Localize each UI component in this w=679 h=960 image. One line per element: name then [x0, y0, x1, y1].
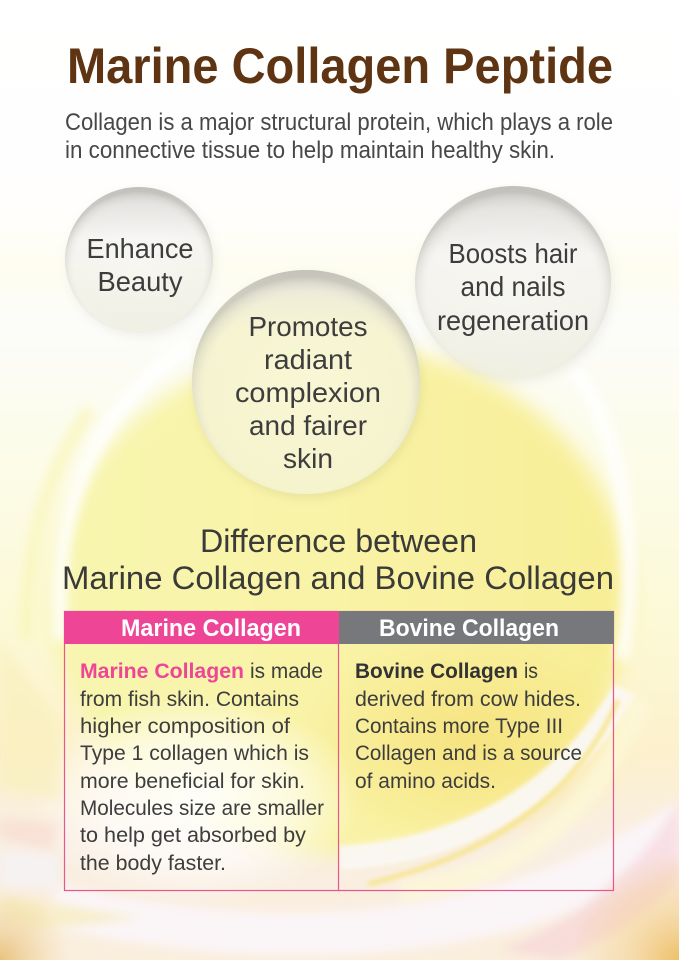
column text: Marine Collagen: to help get absorbed by [80, 824, 307, 847]
comparison heading: Marine Collagen and Bovine Collagen [62, 560, 614, 596]
bubble: Boosts hair and nails regeneration [415, 186, 613, 382]
column text: Marine Collagen: Marine Collagen [80, 660, 244, 683]
column text: Marine Collagen [80, 660, 324, 875]
bubble: Promotes radiant complexion and fairer skin: radiant [264, 344, 352, 375]
column text: Marine Collagen: Molecules size are smaller [80, 797, 324, 820]
column text: Bovine Collagen: Contains more Type III [355, 715, 563, 738]
column text: Marine Collagen: higher composition of [80, 715, 290, 738]
column text: Bovine Collagen: of amino acids. [355, 770, 496, 793]
intro text: Collagen is a major structural protein, which plays a role [65, 109, 613, 136]
header: Marine Collagen [64, 611, 339, 644]
bubble: Boosts hair and nails regeneration: Boosts hair [448, 238, 578, 269]
column text: Bovine Collagen [355, 660, 582, 793]
intro text [65, 109, 613, 164]
column text: Marine Collagen: is made [250, 660, 323, 683]
bubble: Boosts hair and nails regeneration: regeneration [437, 305, 589, 336]
header: Bovine Collagen [339, 611, 614, 644]
bubble: Enhance Beauty: Enhance [86, 233, 194, 264]
bubble: Enhance Beauty: Beauty [98, 266, 182, 297]
column text: Marine Collagen: from fish skin. Contains [80, 688, 299, 711]
bubble: Promotes radiant complexion and fairer skin: Promotes [248, 311, 368, 342]
bubble: Boosts hair and nails regeneration: and nails [460, 271, 566, 302]
bubble: Promotes radiant complexion and fairer skin: complexion [235, 377, 381, 408]
column text: Bovine Collagen: derived from cow hides. [355, 688, 581, 711]
bubble: Promotes radiant complexion and fairer skin [192, 270, 422, 498]
column text: Bovine Collagen: Collagen and is a source [355, 742, 582, 765]
column text: Marine Collagen: Type 1 collagen which is [80, 742, 309, 765]
comparison heading [62, 523, 614, 596]
column text: Bovine Collagen: Bovine Collagen [355, 660, 518, 683]
header: Marine Collagen: Marine Collagen [121, 615, 301, 642]
column text: Marine Collagen: more beneficial for skin. [80, 770, 305, 793]
bubble: Promotes radiant complexion and fairer skin: and fairer [249, 410, 367, 441]
column text: Marine Collagen: the body faster. [80, 852, 226, 875]
bubble: Promotes radiant complexion and fairer skin: skin [283, 443, 333, 474]
column text: Bovine Collagen: is [524, 660, 538, 683]
comparison heading: Difference between [200, 523, 477, 559]
title: Marine Collagen Peptide [67, 38, 613, 94]
header: Bovine Collagen: Bovine Collagen [379, 615, 559, 642]
comparison table [64, 611, 614, 890]
intro text: in connective tissue to help maintain healthy skin. [65, 137, 555, 164]
bubble: Enhance Beauty [65, 187, 215, 336]
